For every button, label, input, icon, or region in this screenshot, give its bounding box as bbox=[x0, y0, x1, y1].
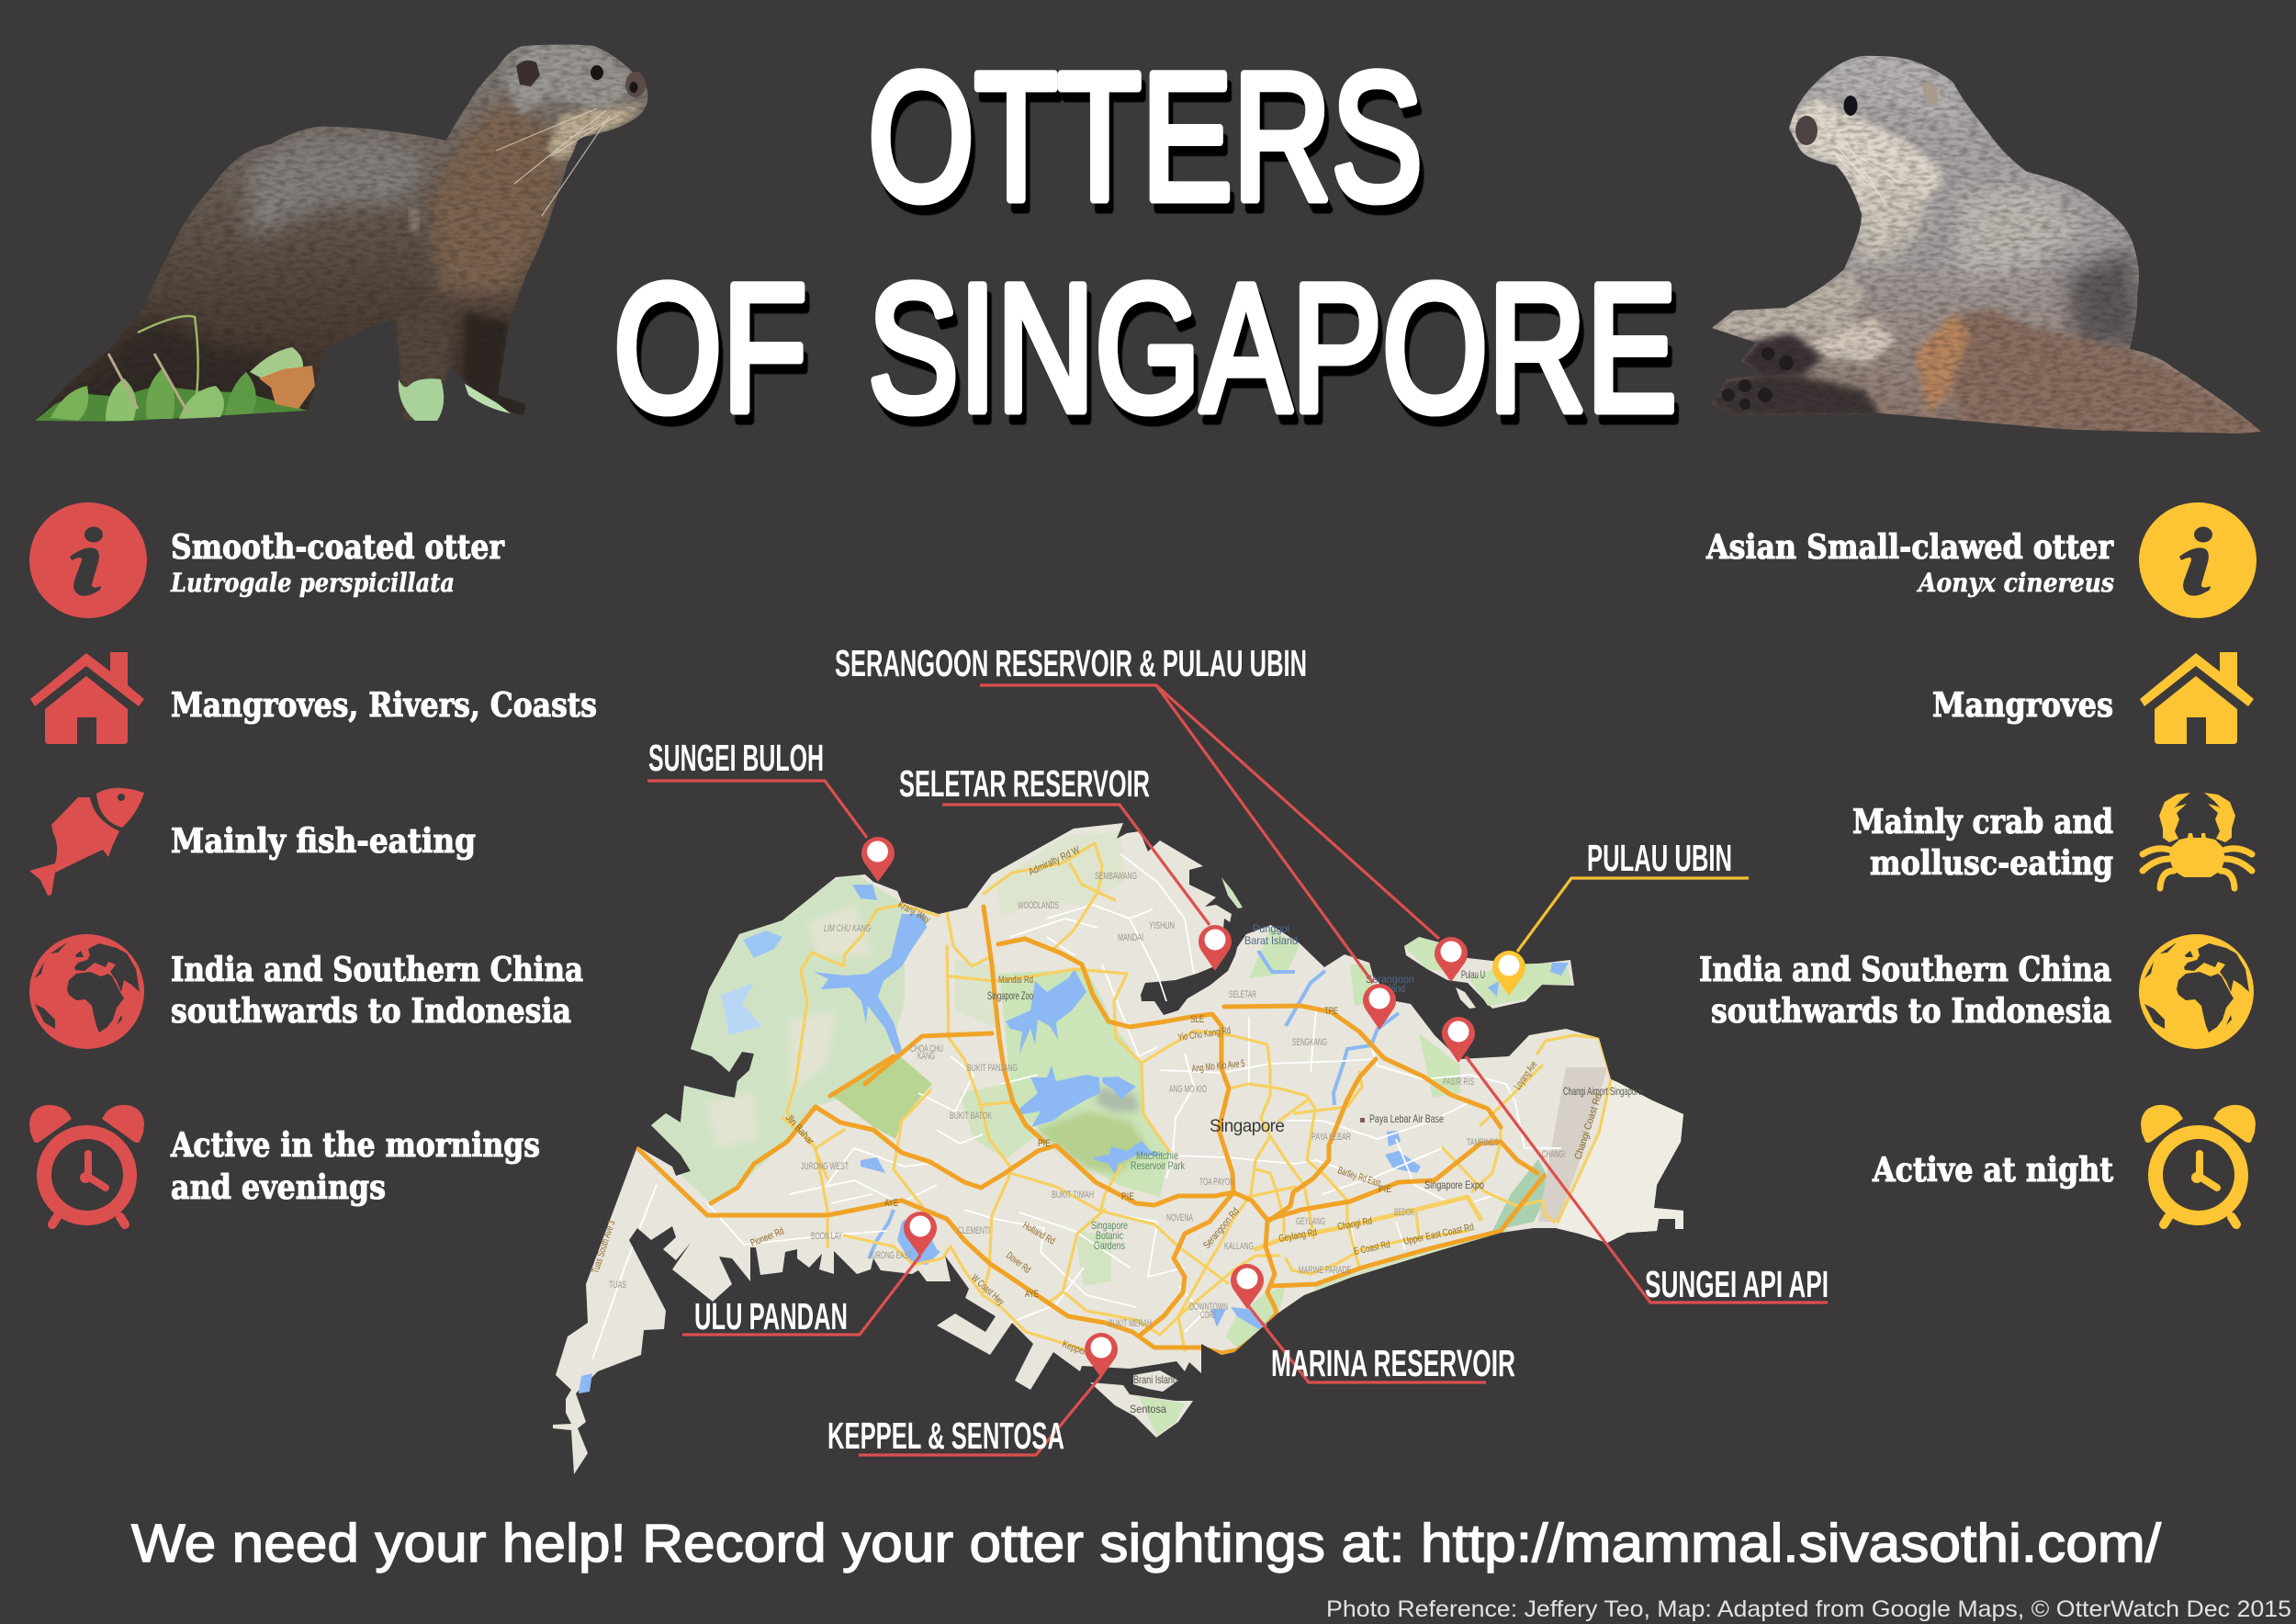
diet text: Mainly fish-eating bbox=[171, 822, 476, 861]
place labels: PAYA LEBAR bbox=[1311, 1132, 1351, 1143]
icon: info yellow bbox=[2139, 502, 2257, 618]
place labels: Serangoon Rd bbox=[1201, 1206, 1242, 1251]
place labels: NOVENA bbox=[1166, 1212, 1193, 1224]
place labels: SENGKANG bbox=[1292, 1037, 1327, 1048]
icon: crab bbox=[2143, 793, 2252, 888]
place labels: Singapore Zoo bbox=[987, 989, 1033, 1002]
pin: Marina bbox=[1231, 1264, 1264, 1309]
place labels: KANG bbox=[917, 1051, 935, 1062]
place labels: Paya Lebar Air Base bbox=[1369, 1112, 1444, 1125]
place labels: Singapore Expo bbox=[1424, 1179, 1484, 1191]
place labels: SLE bbox=[1190, 1014, 1204, 1025]
place labels: TUAS bbox=[609, 1280, 626, 1291]
title: SINGAPORE bbox=[868, 246, 1677, 449]
place labels: Botanic bbox=[1096, 1229, 1123, 1242]
activity text: Active in the mornings bbox=[170, 1126, 540, 1165]
icon: globe red bbox=[29, 934, 144, 1049]
place labels: BOON LAY bbox=[811, 1231, 842, 1242]
pin: Ulu Pandan bbox=[904, 1212, 937, 1257]
place labels: CORE bbox=[1200, 1310, 1217, 1321]
place labels: Singapore bbox=[1210, 1117, 1285, 1136]
place labels: KALLANG bbox=[1224, 1241, 1254, 1252]
green areas bbox=[643, 831, 1690, 1436]
diet text: mollusc-eating bbox=[1870, 844, 2113, 883]
place labels: Pioneer Rd bbox=[749, 1225, 785, 1249]
habitat text: Mangroves, Rivers, Coasts bbox=[171, 686, 597, 725]
place labels: WOODLANDS bbox=[1018, 900, 1059, 911]
pin: Pulau Ubin yellow bbox=[1492, 951, 1525, 996]
place labels: Kranji Way bbox=[896, 899, 932, 926]
place labels: Changi Coast Rd bbox=[1572, 1092, 1604, 1161]
place labels: CHOA CHU bbox=[910, 1043, 943, 1054]
map of Singapore bbox=[553, 823, 1690, 1474]
photo: smooth-coated otter bbox=[35, 44, 647, 423]
pin: Sungei Buloh bbox=[861, 837, 895, 882]
place labels: YISHUN bbox=[1149, 920, 1175, 931]
label: Seletar Reservoir: SELETAR RESERVOIR bbox=[899, 762, 1150, 805]
place labels: PIE bbox=[1121, 1191, 1134, 1202]
place labels: AYE bbox=[884, 1198, 898, 1209]
left column: smooth-coated otter facts bbox=[29, 502, 597, 1225]
icon: globe yellow bbox=[2139, 934, 2254, 1049]
place labels: Pulau U bbox=[1461, 968, 1485, 981]
place labels: W Coast Hwy bbox=[969, 1272, 1007, 1308]
place labels: Changi Airport Singapore bbox=[1563, 1085, 1642, 1098]
place labels: Holland Rd bbox=[1021, 1220, 1056, 1247]
place labels: Changi Rd bbox=[1336, 1216, 1373, 1233]
scientific name: Aonyx cinereus: Aonyx cinereus bbox=[1916, 568, 2114, 598]
airport runway bbox=[1538, 1067, 1607, 1222]
place labels: Sentosa bbox=[1130, 1403, 1166, 1415]
diet text: Mainly crab and bbox=[1852, 803, 2113, 841]
expressways bbox=[637, 907, 1544, 1353]
place labels: TPE bbox=[1324, 1006, 1338, 1017]
title: OF bbox=[613, 246, 807, 449]
place labels: AYE bbox=[1025, 1289, 1039, 1300]
icon: alarm clock yellow bbox=[2141, 1105, 2256, 1225]
icon: fish bbox=[29, 788, 144, 896]
Johor strait inlet bbox=[1141, 919, 1242, 1015]
activity text bbox=[170, 1126, 540, 1207]
label: Pulau Ubin: PULAU UBIN bbox=[1587, 837, 1732, 879]
icon: house yellow bbox=[2140, 652, 2254, 744]
place labels: DOWNTOWN bbox=[1189, 1302, 1228, 1313]
place labels: CLEMENTI bbox=[958, 1225, 990, 1236]
label: Keppel & Sentosa: KEPPEL & SENTOSA bbox=[827, 1415, 1064, 1457]
place labels bbox=[590, 844, 1642, 1415]
place labels: MARINE PARADE bbox=[1299, 1265, 1351, 1276]
range text bbox=[171, 951, 583, 1031]
pin: Pulau Ubin red bbox=[1435, 937, 1468, 982]
place labels: Loyang Ave bbox=[1513, 1059, 1540, 1092]
place labels: Reservoir Park bbox=[1131, 1159, 1186, 1172]
place labels: BUKIT BATOK bbox=[950, 1111, 992, 1122]
label: Ulu Pandan: ULU PANDAN bbox=[694, 1295, 848, 1337]
place labels: GEYLANG bbox=[1296, 1216, 1325, 1227]
place labels: PASIR RIS bbox=[1443, 1077, 1474, 1088]
photo: Asian small-clawed otter bbox=[1708, 55, 2261, 436]
place labels: Yio Chu Kang Rd bbox=[1177, 1025, 1232, 1043]
label: Sungei Api Api: SUNGEI API API bbox=[1645, 1263, 1829, 1305]
place labels: SELETAR bbox=[1229, 989, 1256, 1000]
range text: southwards to Indonesia bbox=[1711, 992, 2111, 1031]
place labels: BUKIT TIMAH bbox=[1052, 1190, 1094, 1201]
place labels: Singapore bbox=[1091, 1219, 1128, 1232]
place labels: PIE bbox=[1379, 1184, 1391, 1195]
place labels: Tuas South Ave 3 bbox=[590, 1219, 617, 1275]
place labels: Dover Rd bbox=[1004, 1250, 1032, 1276]
diet text bbox=[1852, 803, 2113, 883]
place labels: Admiralty Rd W bbox=[1027, 844, 1082, 878]
range text bbox=[1699, 951, 2111, 1031]
place labels: Bartley Rd East bbox=[1336, 1165, 1381, 1190]
leader lines bbox=[647, 685, 1828, 1455]
call to action: We need your help! Record your otter sightings at: http://mammal.sivasothi.com/ bbox=[131, 1514, 2162, 1573]
map pins bbox=[861, 837, 1525, 1378]
place labels: BUKIT PANJANG bbox=[967, 1063, 1018, 1074]
pin: Sungei Api Api bbox=[1442, 1017, 1475, 1063]
icon: alarm clock red bbox=[29, 1105, 144, 1225]
place labels: MacRitchie bbox=[1136, 1149, 1178, 1162]
reservoirs bbox=[579, 885, 1569, 1393]
label: Marina Reservoir: MARINA RESERVOIR bbox=[1271, 1342, 1515, 1384]
place labels: BEDOK bbox=[1394, 1207, 1414, 1218]
range text: southwards to Indonesia bbox=[171, 992, 571, 1031]
place labels: SEMBAWANG bbox=[1095, 871, 1137, 882]
label: Sungei Buloh: SUNGEI BULOH bbox=[648, 737, 824, 779]
place labels: PIE bbox=[1038, 1138, 1051, 1149]
place labels: E Coast Rd bbox=[1353, 1239, 1391, 1257]
place labels: Ang Mo Kio Ave 5 bbox=[1191, 1058, 1245, 1075]
range text: India and Southern China bbox=[171, 951, 583, 989]
title: OTTERS bbox=[868, 35, 1423, 238]
species name: smooth-coated otter: Smooth-coated otter bbox=[171, 528, 505, 567]
activity text: Active at night bbox=[1872, 1151, 2113, 1190]
right column: Asian small-clawed otter facts bbox=[1699, 502, 2257, 1225]
place labels: Punggol bbox=[1253, 922, 1289, 935]
place labels: Mandai Rd bbox=[998, 975, 1033, 986]
place labels: Island bbox=[1382, 982, 1405, 995]
label: Serangoon Reservoir & Pulau Ubin: SERANGOON RESERVOIR & PULAU UBIN bbox=[835, 642, 1307, 684]
place labels: Brani Island bbox=[1133, 1373, 1177, 1386]
place labels: ANG MO KIO bbox=[1169, 1084, 1207, 1095]
place labels: Upper East Coast Rd bbox=[1402, 1222, 1475, 1247]
place labels: Geylang Rd bbox=[1277, 1227, 1318, 1245]
pin: Serangoon bbox=[1363, 984, 1396, 1030]
place labels: Keppel bbox=[1061, 1339, 1087, 1358]
habitat text: Mangroves bbox=[1932, 686, 2113, 725]
scientific name: Lutrogale perspicillata: Lutrogale perspicillata bbox=[170, 568, 455, 598]
place labels: TOA PAYOH bbox=[1199, 1177, 1234, 1188]
icon: info red bbox=[29, 502, 147, 618]
place labels: BUKIT MERAH bbox=[1109, 1318, 1152, 1329]
map location labels bbox=[648, 642, 1829, 1457]
place labels: LIM CHU KANG bbox=[824, 923, 871, 934]
place labels: JURONG WEST bbox=[801, 1161, 849, 1172]
credits: Photo Reference: Jeffery Teo, Map: Adapted from Google Maps, © OtterWatch Dec 2015 bbox=[1326, 1596, 2291, 1622]
place labels: Barat Island bbox=[1244, 934, 1298, 947]
place labels: TAMPINES bbox=[1467, 1137, 1499, 1148]
place labels: Serangoon bbox=[1366, 973, 1414, 986]
pin: Seletar bbox=[1199, 925, 1232, 971]
place labels: JURONG EAST bbox=[869, 1250, 912, 1261]
place labels: CHANGI bbox=[1542, 1149, 1565, 1160]
place labels: Jln Bahar bbox=[783, 1112, 816, 1147]
place labels: Gardens bbox=[1094, 1239, 1125, 1252]
map land bbox=[553, 823, 1683, 1474]
species name: Asian small-clawed otter: Asian Small-clawed otter bbox=[1705, 528, 2114, 567]
pin: Keppel bbox=[1085, 1333, 1118, 1378]
title bbox=[613, 35, 1677, 449]
place labels: MANDAI bbox=[1118, 932, 1143, 943]
icon: house red bbox=[30, 652, 144, 744]
yellow main roads bbox=[782, 843, 1611, 1350]
activity text: and evenings bbox=[171, 1168, 386, 1207]
white minor roads bbox=[592, 854, 1561, 1359]
range text: India and Southern China bbox=[1699, 951, 2111, 989]
